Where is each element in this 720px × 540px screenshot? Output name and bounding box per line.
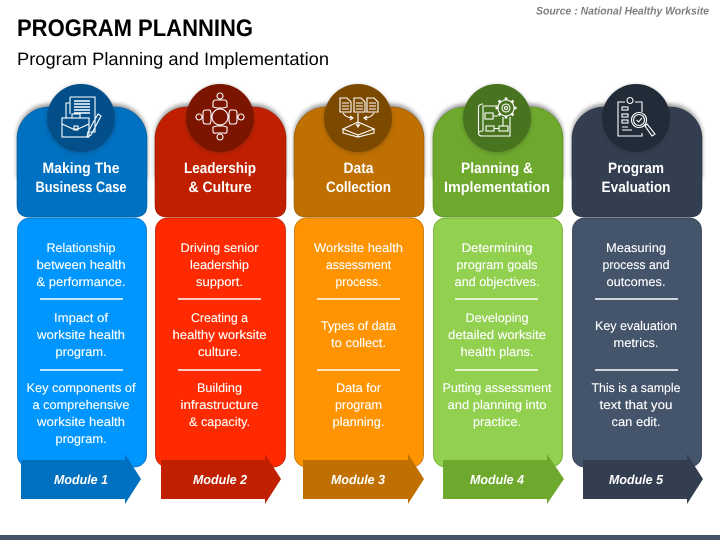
body text 5: process and (602, 258, 670, 272)
header text 3: Data (344, 160, 374, 177)
header card 1 (17, 107, 147, 217)
header text 3: Collection (326, 179, 391, 196)
body text 4 (442, 241, 552, 429)
body text 1: Key components of (26, 381, 136, 395)
body card 1 (18, 218, 146, 467)
icon shadow 3 (324, 85, 392, 153)
icon disc 2 (186, 84, 254, 152)
body text 1: worksite health (36, 328, 125, 342)
icon shadow 4 (463, 85, 531, 153)
body text 2: infrastructure (180, 398, 259, 412)
body text 1: Impact of (54, 311, 109, 325)
icon disc 1 (47, 84, 115, 152)
body card 3 (294, 218, 424, 467)
body text 1: worksite health (36, 415, 125, 429)
body text 2: Building (197, 381, 242, 395)
body text 4: health plans. (460, 345, 534, 359)
body text 2: Driving senior (180, 241, 258, 255)
panel: Module 2 Leadership and Culture (155, 84, 286, 504)
body text 1: & performance. (36, 275, 126, 289)
body text 3: assessment (326, 258, 392, 272)
footer bar (0, 535, 720, 540)
icon: people around a table (196, 93, 244, 140)
header shadow 1 (17, 104, 147, 178)
icon disc 5 (602, 84, 670, 152)
body card 2 (156, 218, 286, 467)
header text 5: Evaluation (602, 179, 670, 196)
body text 2: & capacity. (189, 415, 250, 429)
body card 4 (434, 218, 562, 467)
body text 1: program. (56, 432, 106, 446)
icon shadow 2 (186, 85, 254, 153)
body text 3: planning. (332, 415, 384, 429)
header text 1 (36, 160, 126, 196)
header text 5 (602, 160, 670, 196)
header text 1: Making The (42, 160, 120, 177)
header text 2: & Culture (188, 179, 252, 196)
header text 5: Program (608, 160, 664, 177)
arrow: Module 5: Module 5 (609, 472, 664, 487)
body text 3 (314, 241, 403, 429)
arrow: Module 2 (161, 454, 281, 504)
panel: Module 3 Data Collection (294, 84, 424, 504)
body text 2: support. (196, 275, 243, 289)
body text 4: practice. (473, 415, 521, 429)
header text 2 (184, 160, 256, 196)
panel: Module 1 Making The Business Case (17, 84, 147, 504)
arrow: Module 4 (443, 454, 564, 504)
body text 1 (26, 241, 136, 446)
body text 2: culture. (198, 345, 241, 359)
body text 5: This is a sample (592, 381, 681, 395)
header text 4 (444, 160, 550, 196)
body text 1: program. (56, 345, 106, 359)
arrow: Module 3: Module 3 (331, 472, 386, 487)
panel: Module 4 Planning and Implementation (433, 84, 564, 504)
body text 1: a comprehensive (32, 398, 130, 412)
body text 1: between health (36, 258, 126, 272)
body text 5 (592, 241, 681, 429)
icon shadow 1 (47, 85, 115, 153)
body text 2 (172, 241, 267, 429)
arrow: Module 2: Module 2 (193, 472, 248, 487)
arrow: Module 5 (583, 454, 703, 504)
body text 4: and objectives. (454, 275, 540, 289)
header card 3 (294, 107, 424, 217)
panel: Module 5 Program Evaluation (572, 84, 703, 504)
header shadow 5 (572, 104, 702, 178)
header shadow 4 (433, 104, 563, 178)
body text 2: Creating a (191, 311, 248, 325)
title: PROGRAM PLANNING (17, 15, 253, 42)
icon: documents into a tray (340, 98, 378, 137)
header shadow 3 (294, 104, 424, 178)
body text 4: Determining (462, 241, 533, 255)
arrow: Module 3 (303, 454, 424, 504)
body text 3: program (335, 398, 382, 412)
header shadow 2 (155, 104, 286, 178)
header text 2: Leadership (184, 160, 256, 177)
body text 4: and planning into (448, 398, 547, 412)
body text 4: program goals (456, 258, 538, 272)
body text 3: Worksite health (314, 241, 403, 255)
body text 5: can edit. (612, 415, 660, 429)
header text 1: Business Case (36, 179, 126, 196)
arrow: Module 4: Module 4 (470, 472, 525, 487)
body text 5: outcomes. (606, 275, 666, 289)
body text 1: Relationship (46, 241, 116, 255)
icon: clipboard and magnifier (618, 98, 655, 136)
body text 3: process. (336, 275, 382, 289)
arrow: Module 1 (21, 454, 141, 504)
body text 4: Developing (466, 311, 529, 325)
header card 2 (155, 107, 286, 217)
body text 2: healthy worksite (172, 328, 267, 342)
body text 2: leadership (190, 258, 249, 272)
body text 4: detailed worksite (448, 328, 546, 342)
header card 4 (433, 107, 563, 217)
header text 3 (326, 160, 391, 196)
body text 5: Measuring (606, 241, 666, 255)
arrow: Module 1: Module 1 (54, 472, 108, 487)
body text 5: text that you (600, 398, 673, 412)
icon: briefcase and document (62, 97, 101, 137)
source note: Source : National Healthy Worksite (536, 6, 709, 18)
header text 4: Planning & (461, 160, 533, 177)
header text 4: Implementation (444, 179, 550, 196)
body text 4: Putting assessment (442, 381, 552, 395)
body text 5: Key evaluation (595, 319, 677, 333)
body text 3: to collect. (331, 336, 386, 350)
header card 5 (572, 107, 702, 217)
body text 3: Data for (336, 381, 381, 395)
body card 5 (572, 218, 702, 467)
body text 5: metrics. (614, 336, 658, 350)
icon disc 3 (324, 84, 392, 152)
icon: blueprint and gear (478, 98, 516, 136)
icon disc 4 (463, 84, 531, 152)
subtitle: Program Planning and Implementation (17, 49, 329, 69)
icon shadow 5 (602, 85, 670, 153)
body text 3: Types of data (321, 319, 396, 333)
